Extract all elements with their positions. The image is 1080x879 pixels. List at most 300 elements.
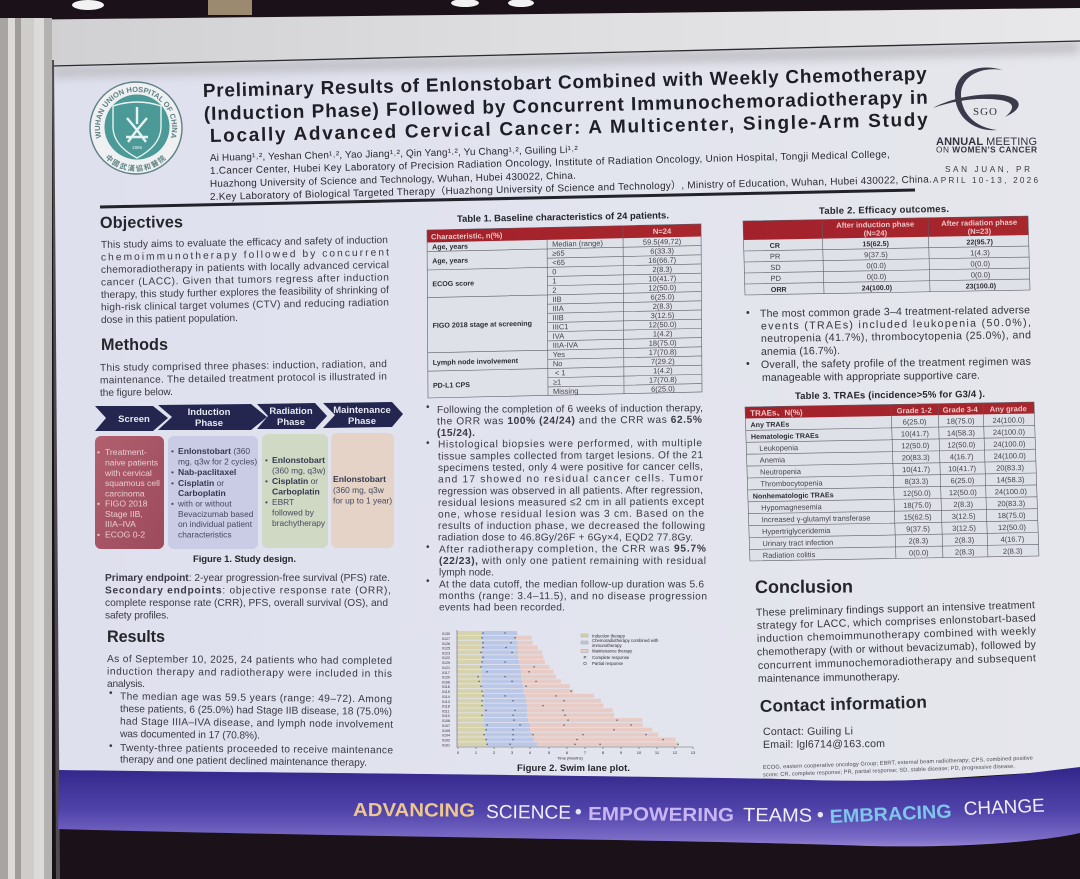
table 3: TRAEs: 12(50.0)	[903, 489, 931, 498]
table 3: TRAEs: Nonhematologic TRAEs	[753, 491, 834, 501]
middle column text: the ORR was 100% (24/24) and the CRR was 62.5%	[437, 415, 702, 427]
box: screen: squamous cell	[105, 478, 160, 488]
results text: these patients, 6 (25.0%) had Stage IIB disease, 18 (75.0%)	[120, 704, 392, 718]
axis numbers	[457, 750, 696, 760]
table 3: TRAEs: Leukopenia	[759, 443, 799, 453]
table 1: baseline characteristics: 12(50.0)	[648, 283, 677, 293]
table 1: baseline characteristics: < 1	[555, 368, 566, 378]
table 3: TRAEs: 0(0.0)	[909, 548, 929, 557]
table 2: efficacy outcomes: 0(0.0)	[866, 261, 887, 270]
table 2: efficacy outcomes: (N=24)	[864, 228, 888, 238]
box: radiation: •	[265, 455, 268, 465]
section: contact information: Contact information	[760, 692, 927, 716]
table 3: TRAEs: 4(16.7)	[950, 452, 974, 461]
results text: therapy and one patient declined maintenance therapy.	[120, 755, 367, 769]
figure 2: swim lane plot	[442, 630, 696, 774]
table 1: baseline characteristics: Median (range)	[552, 239, 603, 249]
table 1: baseline characteristics: IIIB	[553, 313, 564, 322]
logo: SGO annual meeting: ANNUAL MEETING	[936, 136, 1037, 148]
table 1: baseline characteristics: ECOG score	[432, 279, 474, 288]
right column bullets: •	[746, 358, 750, 370]
logo: Wuhan Union Hospital seal	[89, 81, 183, 175]
table 1: baseline characteristics: IIIA-IVA	[553, 340, 578, 350]
chevron: maintenance phase	[323, 402, 403, 428]
title: Locally Advanced Cervical Cancer: A Multicenter, Single-Arm Study	[210, 110, 928, 147]
table 3: TRAEs: Any TRAEs	[750, 421, 789, 429]
middle column text: Histological biopsies were performed, with multiple	[438, 438, 702, 450]
table 3: TRAEs: 24(100.0)	[995, 487, 1028, 496]
contact details: Email: lgl6714@163.com	[763, 738, 885, 751]
patient labels: 0129	[442, 661, 450, 665]
box: screen: •	[97, 447, 100, 457]
box: maintenance: (360 mg, q3w	[333, 485, 385, 495]
objectives text: chemoradiotherapy in patients with locally advanced cervical	[101, 260, 389, 276]
box: screen: Stage IIB,	[105, 509, 143, 519]
middle column text: At the data cutoff, the median follow-up duration was 5.6	[439, 580, 704, 590]
chevron: screen	[95, 406, 168, 431]
patient labels	[442, 632, 450, 748]
axis numbers: 13	[691, 750, 696, 755]
results text	[107, 654, 393, 769]
patient labels: 0106	[442, 680, 450, 684]
middle column text: •	[426, 576, 430, 587]
table 1: baseline characteristics: 1	[552, 276, 557, 286]
legend: Maintenance therapy	[592, 648, 633, 654]
axes	[457, 630, 693, 749]
middle column text: residual lesions measured ≤2 cm in all patients except	[438, 497, 704, 509]
table 1: baseline characteristics: ≥1	[553, 378, 561, 387]
box: radiation: EBRT	[272, 497, 294, 507]
chevron: induction phase: Induction	[188, 407, 231, 418]
box: induction	[168, 436, 258, 549]
endpoints text: Primary endpoint: 2-year progression-free survival (PFS) rate.	[105, 573, 390, 584]
axis numbers: 12	[673, 750, 678, 755]
axis numbers: 9	[620, 750, 623, 755]
patient labels: 0108	[442, 719, 450, 723]
results text: had Stage IIIA–IVA disease, and lymph node involvement	[120, 717, 393, 731]
endpoints text: complete response rate (CRR), PFS, overall survival (OS), and	[105, 598, 388, 609]
section: contact information	[760, 692, 927, 751]
box: induction: Cisplatin or	[178, 478, 224, 488]
footnote: ECOG, eastern cooperative oncology Group; EBRT, external beam radiotherapy; CPS, combined positive	[763, 756, 1033, 771]
table 1: baseline characteristics: 3(12.5)	[651, 311, 675, 320]
conclusion text: maintenance immunotherapy.	[758, 671, 900, 685]
middle column text: After radiotherapy completion, the CRR was 95.7%	[439, 544, 706, 555]
box: radiation: brachytherapy	[272, 518, 326, 528]
results text: was documented in 17 (70.8%).	[119, 729, 260, 742]
table 1: baseline characteristics: 18(75.0)	[649, 338, 677, 348]
conclusion text: chemotherapy (with or without bevacizumab), followed by	[757, 639, 1037, 658]
table 1: baseline characteristics: ≥65	[552, 249, 565, 258]
table 3: TRAEs: Neutropenia	[760, 467, 802, 477]
table 2 title: Table 2. Efficacy outcomes.	[819, 204, 949, 217]
endpoints text: Secondary endpoints: objective response rate (ORR),	[105, 586, 391, 596]
box: induction: •	[171, 478, 174, 488]
middle column text: specimens tested, only 4 were positive for cancer cells,	[438, 462, 703, 474]
box: screen: carcinoma	[105, 488, 145, 498]
methods text: This study comprised three phases: induction, radiation, and	[100, 359, 387, 374]
table 3: TRAEs: TRAEs、N(%)	[750, 408, 803, 418]
methods text	[100, 359, 387, 399]
patient labels: 0115	[442, 690, 450, 694]
table 2: efficacy outcomes: PR	[770, 252, 781, 261]
title	[203, 64, 928, 147]
table 3: TRAEs: 24(100.0)	[992, 415, 1025, 425]
banner slogan: SCIENCE	[486, 802, 571, 824]
box: induction: •	[171, 467, 174, 477]
table 3: TRAEs: 12(50.0)	[901, 441, 930, 450]
axis numbers: 0	[457, 750, 460, 755]
results text: •	[109, 688, 113, 699]
table 1: baseline characteristics: 1(4.2)	[653, 366, 673, 375]
patient labels: 0121	[442, 666, 450, 670]
table 1: baseline characteristics: 16(66.7)	[648, 255, 677, 265]
response markers	[478, 633, 678, 744]
table 1: baseline characteristics: Age, years	[432, 257, 468, 265]
patient labels: 0125	[442, 646, 450, 650]
results text: The median age was 59.5 years (range: 49–72). Among	[120, 692, 392, 705]
chevron: maintenance phase: Maintenance	[333, 405, 391, 416]
middle column text: Following the completion of 6 weeks of induction therapy,	[437, 403, 703, 416]
patient labels: 0116	[442, 685, 450, 689]
table 1 title: Table 1. Baseline characteristics of 24 patients.	[457, 210, 669, 225]
section: results	[107, 628, 393, 769]
box: induction: Bevacizumab based	[178, 509, 254, 519]
table 2: efficacy outcomes: 0(0.0)	[970, 259, 991, 269]
box: screen: •	[97, 530, 100, 540]
box: screen: with cervical	[104, 468, 152, 478]
banner slogan: ADVANCING	[353, 800, 475, 822]
logo: Wuhan Union Hospital seal: WUHAN UNION HOSPITAL OF CHINA	[94, 86, 178, 139]
patient labels: 0104	[442, 734, 450, 738]
patient labels: 0107	[442, 724, 450, 728]
box: induction: with or without	[177, 498, 232, 508]
axis numbers: 7	[584, 750, 587, 755]
endpoints text	[105, 573, 391, 622]
conclusion text: induction chemoimmunotherapy combined with weekly	[757, 625, 1037, 645]
logo: Wuhan Union Hospital seal: 中國武漢協和醫院	[106, 154, 166, 172]
table 1: baseline characteristics: IIB	[552, 295, 562, 304]
table 2: efficacy outcomes: 9(37.5)	[864, 250, 888, 259]
box: induction: Enlonstobart (360	[178, 446, 250, 456]
table 2: efficacy outcomes: 22(95.7)	[966, 238, 994, 247]
legend: P	[583, 655, 587, 660]
table 3: TRAEs: Hypertriglyceridemia	[762, 526, 831, 536]
table 1: baseline characteristics: Characteristic, n(%)	[431, 231, 503, 241]
banner slogan: EMPOWERING	[588, 804, 734, 826]
table 1: baseline characteristics: 6(25.0)	[651, 384, 675, 394]
table 1: baseline characteristics: FIGO 2018 stage at screening	[433, 320, 532, 330]
middle column text: months (range: 3.4–11.5), and no disease progression	[439, 591, 707, 602]
chevron: radiation phase	[257, 403, 327, 429]
axis numbers: Time (Months)	[557, 756, 583, 760]
table 2: efficacy outcomes: 15(62.5)	[862, 240, 890, 248]
table 1: baseline characteristics: 0	[552, 267, 556, 276]
table 3: TRAEs: 2(8.3)	[908, 536, 929, 546]
table 3: TRAEs: 14(58.3)	[996, 475, 1025, 484]
chevron: radiation phase: Radiation	[269, 406, 313, 417]
middle column text: •	[426, 438, 430, 449]
middle column text: results of induction phase, we decreased the following	[438, 521, 705, 532]
box: radiation: •	[265, 497, 268, 507]
legend: Partial response	[592, 661, 624, 666]
bars: chemoradiotherapy combined with immunotherapy	[482, 631, 537, 746]
logo: SGO annual meeting: SAN JUAN, PR	[945, 165, 1030, 174]
patient labels: 0130	[442, 632, 450, 636]
table 3: TRAEs: 10(41.7)	[901, 429, 930, 439]
table 3: TRAEs: Grade 1-2	[897, 406, 932, 415]
middle column text: (15/24).	[437, 428, 475, 439]
patient labels: 0114	[442, 695, 450, 699]
table 2: efficacy outcomes	[743, 216, 1030, 295]
table 3: TRAEs: 10(41.7)	[902, 465, 931, 474]
authors and affiliations: 1.Cancer Center, Hubei Key Laboratory of Precision Radiation Oncology, Institute of Radiation Oncology, Union Hospital, Tongji Medical College,	[210, 149, 890, 177]
ceiling lights	[72, 0, 534, 15]
axis numbers: 10	[637, 750, 642, 755]
logo: SGO annual meeting	[933, 68, 1038, 185]
patient labels: 0113	[442, 700, 450, 704]
box: radiation: •	[265, 476, 268, 486]
middle column text: lymph node.	[439, 568, 494, 578]
table 3: TRAEs: 12(50.0)	[998, 523, 1027, 532]
table 3: TRAEs: 20(83.3)	[997, 499, 1026, 508]
right column bullets: anemia (16.7%).	[761, 345, 840, 358]
table 1: baseline characteristics: 2(8.3)	[653, 302, 673, 311]
patient labels: 0105	[442, 729, 450, 733]
title: Preliminary Results of Enlonstobart Combined with Weekly Chemotherapy	[203, 64, 927, 102]
conclusion text: strategy for LACC, which comprises enlonstobart-based	[757, 612, 1036, 632]
middle column text: events had been recorded.	[439, 602, 565, 614]
box: induction: •	[171, 446, 174, 456]
table 2: efficacy outcomes: 1(4.3)	[970, 248, 990, 258]
results text: analysis.	[107, 679, 145, 690]
middle column text: and 17 showed no residual cancer cells. Tumor	[438, 473, 704, 485]
box: maintenance	[331, 433, 394, 548]
box: screen: ECOG 0-2	[105, 530, 145, 540]
methods text: maintenance. The detailed treatment protocol is illustrated in	[100, 371, 387, 386]
table 3: TRAEs	[745, 402, 1039, 561]
legend	[581, 634, 659, 666]
axis numbers: 2	[493, 750, 496, 755]
table 3: TRAEs: 12(50.0)	[947, 440, 976, 450]
table 2: efficacy outcomes: 23(100.0)	[966, 282, 997, 291]
banner	[58, 767, 1080, 846]
table 1: baseline characteristics: 59.5(49,72)	[643, 237, 682, 247]
box: radiation: (360 mg, q3w)	[272, 466, 326, 476]
axis numbers: 6	[566, 750, 569, 755]
section: conclusion: Conclusion	[755, 576, 853, 597]
table 1: baseline characteristics: Missing	[553, 386, 578, 396]
patient labels: 0117	[442, 671, 450, 675]
table 3: TRAEs: 4(16.7)	[1000, 535, 1025, 544]
box: screen: •	[97, 498, 100, 508]
footnote	[763, 756, 1033, 778]
table 2: efficacy outcomes: PD	[770, 274, 782, 283]
box: induction: characteristics	[178, 530, 232, 540]
middle column text: one, whose residual lesion was 3 cm. Based on the	[438, 509, 704, 520]
table 1: baseline characteristics	[427, 224, 702, 399]
authors and affiliations	[210, 145, 932, 203]
table 3: TRAEs: 14(58.3)	[947, 428, 976, 438]
methods text: the figure below.	[100, 387, 173, 399]
table 2: efficacy outcomes: ORR	[771, 286, 787, 294]
banner slogan: EMBRACING	[829, 801, 952, 828]
table 1: baseline characteristics: 17(70.8)	[649, 347, 677, 357]
table 3: TRAEs: 2(8.3)	[1003, 546, 1023, 556]
logo: Wuhan Union Hospital seal: 1866	[132, 145, 143, 150]
table 3: TRAEs: Thrombocytopenia	[760, 478, 824, 489]
table 3: TRAEs: Any grade	[989, 404, 1027, 414]
section: objectives: Objectives	[100, 213, 183, 232]
middle column text	[426, 402, 707, 614]
table 3: TRAEs: Hematologic TRAEs	[751, 432, 819, 441]
table 3: TRAEs: 24(100.0)	[993, 439, 1026, 449]
table 3: TRAEs: 3(12.5)	[952, 523, 977, 533]
table 1: baseline characteristics: Age, years	[432, 243, 468, 251]
table 3: TRAEs: Urinary tract infection	[762, 538, 833, 548]
table 3: TRAEs: 24(100.0)	[994, 451, 1026, 461]
table 1: baseline characteristics: 1(4.2)	[653, 329, 673, 339]
table 2: efficacy outcomes: After radiation phase	[941, 218, 1017, 228]
table 2: efficacy outcomes: CR	[770, 242, 780, 250]
objectives text: cancer (LACC). Given that tumors regress after induction	[101, 272, 389, 288]
right column bullets: Overall, the safety profile of the treatment regimen was	[761, 356, 1031, 371]
banner slogan: •	[817, 805, 824, 826]
section: conclusion	[755, 576, 1037, 685]
box: screen: IIIA–IVA	[105, 519, 136, 529]
left frame column	[0, 18, 60, 879]
legend: Complete response	[592, 655, 630, 660]
middle column text: regression was observed in all patients. After regression,	[438, 485, 703, 497]
section: methods	[100, 336, 387, 399]
table 3: TRAEs: Radiation colitis	[763, 550, 816, 560]
contact details	[763, 725, 885, 751]
axis numbers: 4	[529, 750, 532, 755]
box: screen: FIGO 2018	[105, 498, 148, 508]
box: maintenance: Enlonstobart	[333, 474, 386, 484]
right column bullets: manageable with appropriate supportive care.	[762, 370, 980, 384]
results text: Twenty-three patients proceeded to receive maintenance	[120, 743, 393, 756]
box: radiation: Enlonstobart	[272, 455, 325, 465]
results text: induction therapy and radiotherapy were included in this	[107, 667, 392, 680]
logo: SGO annual meeting: ON WOMEN'S CANCER	[936, 144, 1037, 154]
table 1: baseline characteristics: 7(29.2)	[651, 357, 675, 366]
right column bullets: The most common grade 3–4 treatment-related adverse	[760, 304, 1030, 320]
objectives text	[101, 235, 389, 326]
box: radiation: Carboplatin	[272, 486, 320, 496]
table 3: TRAEs: 15(62.5)	[904, 512, 932, 522]
section: objectives	[100, 213, 389, 326]
middle column text: •	[426, 542, 430, 553]
axis numbers: 8	[602, 750, 605, 755]
table 1: baseline characteristics: Yes	[553, 350, 565, 359]
axis numbers: 11	[655, 750, 660, 755]
table 1: baseline characteristics: PD-L1 CPS	[433, 381, 470, 390]
table 2: efficacy outcomes: SD	[770, 263, 781, 272]
authors and affiliations: 2.Key Laboratory of Biological Targeted Therapy（Huazhong University of Science and Technology）, Ministry of Education, Wuhan, Hubei 430022, China.	[210, 173, 932, 203]
authors and affiliations: Ai Huang¹˒², Yeshan Chen¹˒², Yao Jiang¹˒², Qin Yang¹˒², Yu Chang¹˒², Guiling Li¹˒²	[210, 145, 579, 164]
title: (Induction Phase) Followed by Concurrent Immunochemoradiotherapy in	[204, 88, 928, 125]
table 2: efficacy outcomes: 24(100.0)	[862, 284, 893, 292]
objectives text: high-risk clinical target volumes (CTV) and reducing radiation	[101, 297, 389, 313]
banner slogan	[353, 796, 1045, 828]
results text: As of September 10, 2025, 24 patients who had completed	[107, 654, 392, 667]
chevron: maintenance phase: Phase	[348, 416, 376, 427]
patient labels: 0127	[442, 637, 450, 641]
table 3: TRAEs: 6(25.0)	[903, 417, 927, 427]
table 1: baseline characteristics: 6(25.0)	[651, 292, 675, 302]
table 3: TRAEs: 10(41.7)	[948, 464, 977, 473]
table 1: baseline characteristics: 10(41.7)	[648, 274, 677, 283]
chevron: radiation phase: Phase	[277, 417, 305, 428]
box: radiation: followed by	[272, 508, 315, 518]
table 1: baseline characteristics: 12(50.0)	[649, 320, 677, 329]
legend: O	[583, 661, 587, 666]
bars: induction therapy	[457, 631, 487, 746]
right column bullets: •	[746, 307, 750, 319]
box: screen: Treatment-	[105, 447, 147, 457]
objectives text: chemoimmunotherapy followed by concurrent	[101, 247, 389, 263]
table 3: TRAEs: Hypomagnesemia	[761, 502, 823, 512]
header rule	[100, 190, 915, 207]
box: maintenance: for up to 1 year)	[333, 496, 392, 506]
conclusion text	[756, 599, 1037, 685]
table 3: TRAEs: 8(33.3)	[904, 477, 929, 486]
table 1: baseline characteristics: <65	[552, 258, 565, 267]
table 3: TRAEs: 2(8.3)	[953, 500, 974, 509]
table 2: efficacy outcomes: (N=23)	[968, 227, 992, 236]
axis numbers: 3	[511, 750, 514, 755]
middle column text: radiation dose to 46.8Gy/26F + 6Gy×4, EQD2 77.8Gy.	[438, 532, 693, 544]
middle column text: •	[426, 402, 430, 413]
authors and affiliations: Huazhong University of Science and Technology, Wuhan, Hubei 430022, China.	[210, 171, 576, 190]
box: induction: Carboplatin	[178, 488, 226, 498]
table 3: TRAEs: 18(75.0)	[998, 511, 1026, 520]
legend: Chemoradiotherapy combined with	[592, 638, 659, 643]
table 3: TRAEs: 3(12.5)	[952, 512, 976, 521]
middle column text: (22/23), with only one patient remaining with residual	[439, 556, 706, 567]
right column bullets	[746, 304, 1031, 384]
box: radiation	[262, 434, 328, 548]
box: induction: Nab-paclitaxel	[178, 467, 236, 477]
patient labels: 0120	[442, 676, 450, 680]
patient labels: 0123	[442, 652, 450, 656]
chevron: screen: Screen	[118, 414, 150, 425]
table 3: TRAEs: Grade 3-4	[943, 405, 979, 415]
chevron: induction phase: Phase	[195, 418, 223, 429]
table 3: TRAEs: 2(8.3)	[955, 547, 975, 557]
table 1: baseline characteristics: N=24	[653, 227, 672, 236]
table 3: TRAEs: 20(83.3)	[996, 463, 1025, 473]
patient labels: 0101	[442, 744, 450, 748]
axis numbers: 1	[475, 750, 478, 755]
logo: SGO annual meeting: SGO	[973, 106, 997, 118]
table 3 title: Table 3. TRAEs (incidence>5% for G3/4 ).	[795, 389, 985, 402]
table 2: efficacy outcomes: After induction phase	[836, 220, 914, 230]
patient labels: 0122	[442, 656, 450, 660]
banner slogan: CHANGE	[963, 796, 1045, 820]
caption: figure 1: Figure 1. Study design.	[193, 554, 296, 565]
table 1: baseline characteristics: Lymph node involvement	[433, 357, 519, 367]
table 1: baseline characteristics: 17(70.8)	[649, 375, 677, 385]
table 2: efficacy outcomes: 0(0.0)	[971, 270, 991, 280]
table 1: baseline characteristics: 2	[552, 286, 557, 295]
table 3: TRAEs: 18(75.0)	[903, 500, 932, 510]
results text: •	[109, 741, 113, 752]
table 3: TRAEs: 6(25.0)	[950, 476, 975, 485]
table 3: TRAEs: 18(75.0)	[946, 416, 975, 426]
section: methods: Methods	[101, 336, 168, 354]
